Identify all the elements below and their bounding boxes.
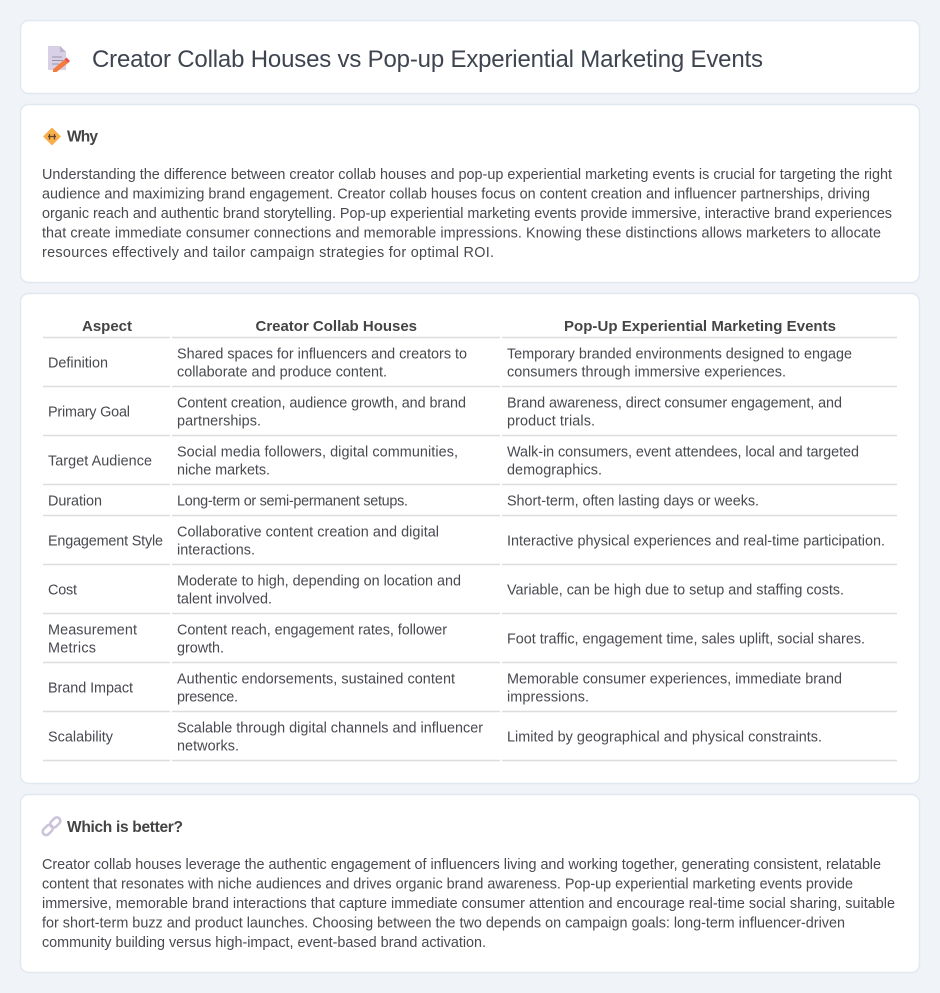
text block: which is better paragraph: immersive, memorable brand interactions that capture immediate consumer attention and encourage real-time social sharing, suitable	[42, 896, 895, 912]
row: target audience: Social media followers, digital communities,	[177, 444, 458, 460]
row: definition: Definition	[48, 356, 108, 372]
row: definition: consumers through immersive experiences.	[507, 364, 786, 380]
row: cost: talent involved.	[177, 592, 272, 608]
text block: which is better paragraph: content that resonates with niche audiences and drives organic brand awareness. Pop-up experiential marketing events provide	[42, 876, 853, 892]
row: scalability: networks.	[177, 738, 239, 754]
text block: why paragraph: resources effectively and tailor campaign strategies for optimal ROI.	[42, 245, 494, 261]
row: measurement metrics	[43, 622, 897, 662]
row: scalability: Scalable through digital channels and influencer	[177, 720, 483, 736]
row: target audience	[43, 444, 897, 484]
icon: link	[41, 816, 62, 837]
row: target audience: Target Audience	[48, 454, 152, 470]
text block: why paragraph: organic reach and authentic brand storytelling. Pop-up experiential marketing events provide immersive, interactive brand experiences	[42, 206, 892, 222]
row: measurement metrics: Content reach, engagement rates, follower	[177, 622, 447, 638]
text block: why paragraph: that create immediate consumer connections and memorable impressions. Knowing these distinctions allows marketers to allocate	[42, 226, 881, 242]
row: definition: Temporary branded environments designed to engage	[507, 346, 852, 362]
table header row	[43, 318, 897, 338]
row: primary goal	[43, 396, 897, 436]
row: measurement metrics: Measurement	[48, 622, 137, 638]
row: primary goal: Primary Goal	[48, 404, 130, 420]
icon: memo with pencil	[48, 46, 70, 72]
row: definition	[43, 346, 897, 386]
row: brand impact: Brand Impact	[48, 680, 133, 696]
row: duration: Short-term, often lasting days or weeks.	[507, 494, 759, 510]
row: engagement style	[43, 524, 897, 564]
row: engagement style: Engagement Style	[48, 534, 163, 550]
title: Creator Collab Houses vs Pop-up Experiential Marketing Events	[92, 46, 763, 73]
row: duration: Duration	[48, 494, 102, 510]
row: scalability: Scalability	[48, 730, 114, 746]
row: primary goal: product trials.	[507, 414, 595, 430]
table header row: Aspect	[82, 318, 132, 335]
row: definition: collaborate and produce content.	[177, 364, 387, 380]
text block: which is better paragraph	[42, 857, 895, 951]
row: target audience: niche markets.	[177, 462, 270, 478]
panel: comparison table	[20, 294, 920, 784]
row: cost: Cost	[48, 582, 77, 598]
table header row: Pop-Up Experiential Marketing Events	[564, 318, 836, 335]
panel: header	[20, 20, 920, 94]
text block: why paragraph: Understanding the difference between creator collab houses and pop-up experiential marketing events is crucial for targeting the right	[42, 167, 892, 183]
heading: why: Why	[67, 128, 98, 146]
row: primary goal: Brand awareness, direct consumer engagement, and	[507, 396, 842, 412]
row: brand impact: Memorable consumer experiences, immediate brand	[507, 672, 842, 688]
row: duration: Long-term or semi-permanent setups.	[177, 494, 408, 510]
panel: why	[20, 104, 920, 282]
table header row: Creator Collab Houses	[256, 318, 417, 335]
row: brand impact	[43, 672, 897, 712]
panel: which is better	[20, 794, 920, 972]
text block: which is better paragraph: for short-term buzz and product launches. Choosing between the two depends on campaign goals: long-term influencer-driven	[42, 916, 845, 932]
row: measurement metrics: Metrics	[48, 640, 96, 656]
text block: which is better paragraph: Creator collab houses leverage the authentic engagement of influencers living and working together, generating consistent, relatable	[42, 857, 881, 873]
row: duration	[43, 494, 897, 516]
row: target audience: Walk-in consumers, event attendees, local and targeted	[507, 444, 859, 460]
text block: why paragraph: audience and maximizing brand engagement. Creator collab houses focus on content creation and influencer partnerships, driving	[42, 186, 870, 202]
row: brand impact: Authentic endorsements, sustained content	[177, 672, 455, 688]
row: primary goal: Content creation, audience growth, and brand	[177, 396, 466, 412]
row: primary goal: partnerships.	[177, 414, 261, 430]
row: cost	[43, 574, 897, 614]
row: scalability	[43, 720, 897, 760]
row: target audience: demographics.	[507, 462, 602, 478]
row: cost: Moderate to high, depending on location and	[177, 574, 461, 590]
row: measurement metrics: growth.	[177, 640, 224, 656]
row: cost: Variable, can be high due to setup and staffing costs.	[507, 582, 844, 598]
row: measurement metrics: Foot traffic, engagement time, sales uplift, social shares.	[507, 632, 865, 648]
row: brand impact: presence.	[177, 690, 238, 706]
row: engagement style: Collaborative content creation and digital	[177, 524, 439, 540]
icon: diamond sign	[44, 128, 60, 144]
row: definition: Shared spaces for influencers and creators to	[177, 346, 467, 362]
row: scalability: Limited by geographical and physical constraints.	[507, 730, 822, 746]
heading: which is better: Which is better?	[67, 819, 183, 836]
text block: why paragraph	[42, 167, 892, 261]
row: brand impact: impressions.	[507, 690, 589, 706]
row: engagement style: Interactive physical experiences and real-time participation.	[507, 534, 885, 550]
row: engagement style: interactions.	[177, 542, 255, 558]
text block: which is better paragraph: community building versus high-impact, event-based brand activation.	[42, 935, 486, 951]
